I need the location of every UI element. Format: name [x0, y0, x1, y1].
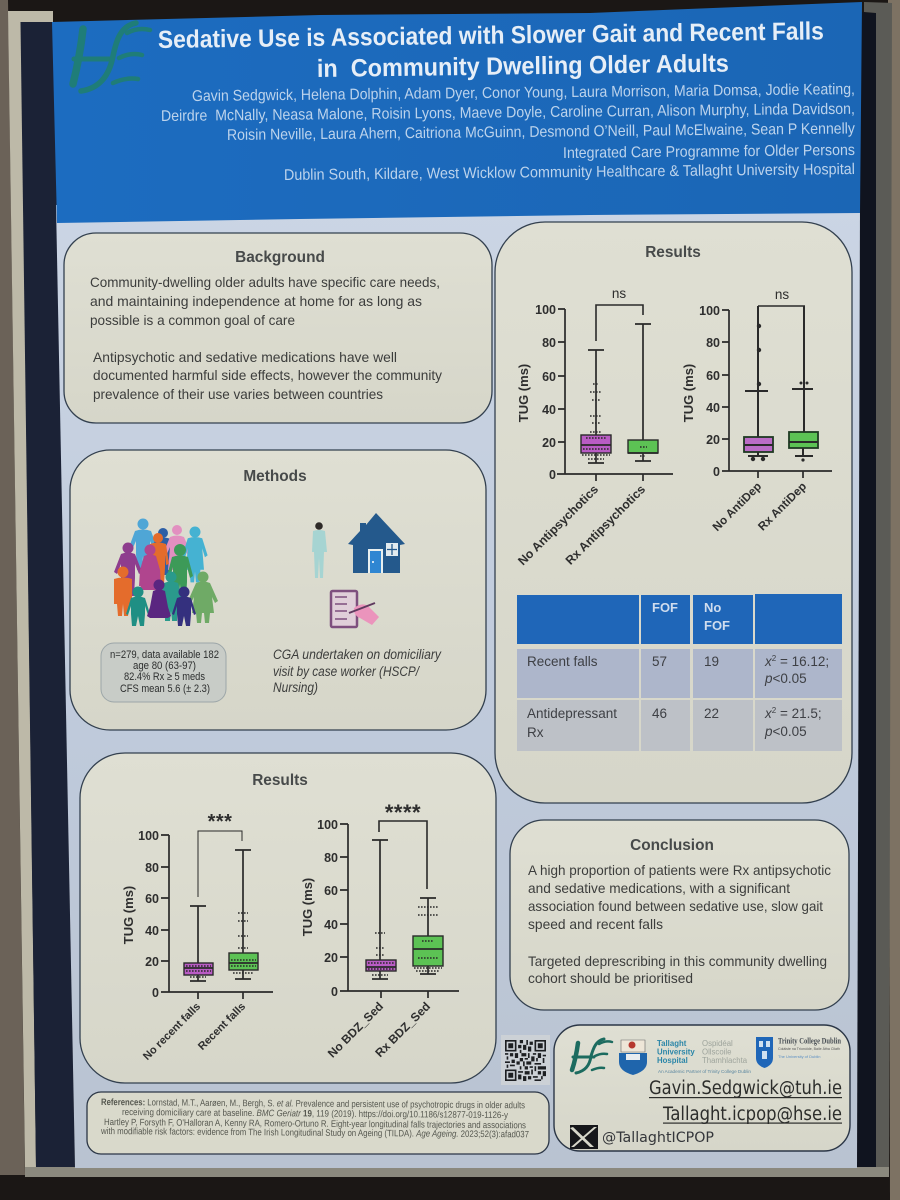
- conclusion text: Targeted deprescribing in this community dwelling: [528, 953, 827, 969]
- title: in Community Dwelling Older Adults: [317, 50, 729, 83]
- table: FOF: [517, 594, 842, 751]
- title: Sedative Use is Associated with Slower Gait and Recent Falls: [158, 17, 824, 54]
- chart: antidepressants: No AntiDep: [710, 480, 764, 534]
- table: FOF: 22: [704, 706, 719, 721]
- panel: results right: [495, 222, 852, 803]
- logo: Tallaght University Hospital: Tallaght: [657, 1039, 687, 1048]
- poster body: [56, 205, 860, 1168]
- icon: group of older people: [114, 518, 218, 626]
- table: FOF: Antidepressant: [527, 706, 617, 721]
- contact emails: Tallaght.icpop@hse.ie: [662, 1104, 842, 1125]
- background text: [90, 274, 442, 402]
- table: FOF: Recent falls: [527, 654, 598, 669]
- chart: recent falls: ***: [208, 811, 232, 833]
- conclusion text: cohort should be prioritised: [528, 970, 693, 986]
- chart: antidepressants: TUG (ms): [681, 364, 696, 422]
- chart: BDZ sedative: 60: [324, 884, 338, 898]
- conclusion text: speed and recent falls: [528, 916, 663, 932]
- chart: antipsychotics: 40: [542, 403, 556, 417]
- CGA text: CGA undertaken on domiciliary: [273, 647, 442, 662]
- icon: house: [348, 513, 405, 573]
- table: FOF: 57: [652, 654, 667, 669]
- chart: BDZ sedative: 80: [324, 851, 338, 865]
- chart: antipsychotics: Rx Antipsychotics: [563, 482, 648, 568]
- contact emails: Gavin.Sedgwick@tuh.ie: [649, 1078, 842, 1099]
- chart: antidepressants: 20: [706, 433, 720, 447]
- chart: recent falls: 20: [145, 955, 159, 969]
- panel: methods: [70, 450, 486, 730]
- stats callout: CFS mean 5.6 (± 2.3): [120, 683, 210, 695]
- chart: BDZ sedative: Rx BDZ_Sed: [372, 999, 433, 1060]
- logo: Tallaght University Hospital: An Academic Partner of Trinity College Dublin: [658, 1069, 751, 1074]
- chart: recent falls: 80: [145, 861, 159, 875]
- chart: recent falls: 0: [152, 986, 159, 1000]
- icon: HSE logo: [73, 23, 150, 91]
- conclusion text: association found between sedative use, slow gait: [528, 898, 823, 914]
- authors and affiliations: Gavin Sedgwick, Helena Dolphin, Adam Dyer, Conor Young, Laura Morrison, Maria Domsa, Jodie Keating,: [192, 81, 855, 105]
- references text: receiving domiciliary care at baseline. BMC Geriatr 19, 119 (2019). https://doi.org/10.1186/s12877-019-1126-y: [122, 1107, 508, 1120]
- chart: antipsychotics: 100: [535, 303, 556, 317]
- logo: Tallaght University Hospital: Ollscoile: [702, 1048, 731, 1056]
- CGA text: Nursing): [273, 680, 318, 695]
- references text: References: Lornstad, M.T., Aarøen, M., Bergh, S. et al. Prevalence and persistent use of psychotropic drugs in older adults: [101, 1097, 525, 1110]
- chart: BDZ sedative: TUG (ms): [300, 878, 315, 936]
- chart: recent falls: 60: [145, 892, 159, 906]
- logo: HSE: [572, 1039, 612, 1073]
- CGA text: [273, 647, 442, 695]
- background text: and maintaining independence at home for as long as: [90, 293, 422, 309]
- table: FOF: FOF: [704, 618, 730, 633]
- chart: BDZ sedative: 100: [317, 818, 338, 832]
- table: FOF: = 21.5;: [776, 706, 822, 721]
- conclusion text: and sedative medications, with a significant: [528, 880, 790, 896]
- background text: prevalence of their use varies between countries: [93, 386, 383, 402]
- chart: antipsychotics: ns: [612, 286, 626, 301]
- references text: with modifiable risk factors: evidence from The Irish Longitudinal Study on Ageing (TILDA). Age Ageing. 2023;52(3):afad037: [100, 1126, 529, 1139]
- references text: [100, 1097, 529, 1139]
- stats callout: [101, 643, 226, 702]
- background text: documented harmful side effects, however the community: [93, 367, 442, 383]
- chart: antidepressants: 0: [713, 465, 720, 479]
- stats callout: age 80 (63-97): [133, 660, 196, 672]
- chart: antidepressants: [681, 287, 832, 534]
- chart: antidepressants: 60: [706, 369, 720, 383]
- chart: antipsychotics: 20: [542, 436, 556, 450]
- logo: Trinity College Dublin: [756, 1036, 841, 1068]
- table: FOF: No: [704, 600, 721, 615]
- chart: antipsychotics: 0: [549, 468, 556, 482]
- chart: antidepressants: Rx AntiDep: [756, 480, 809, 533]
- panel: conclusion: [510, 820, 849, 1010]
- conclusion text: [528, 862, 831, 986]
- logo: Tallaght University Hospital: Hospital: [657, 1056, 688, 1065]
- table: FOF: 19: [704, 654, 719, 669]
- table: FOF: Rx: [527, 725, 544, 740]
- icon: checklist and hand: [331, 591, 379, 627]
- chart: antidepressants: 40: [706, 401, 720, 415]
- logo: Trinity College Dublin: Trinity College Dublin: [778, 1036, 841, 1046]
- heading: methods: Methods: [243, 468, 307, 485]
- chart: antipsychotics: 60: [542, 370, 556, 384]
- table: FOF: 2: [772, 654, 777, 663]
- logo: Trinity College Dublin: The University of Dublin: [778, 1054, 820, 1059]
- authors and affiliations: Roisin Neville, Laura Ahern, Caitriona McGuinn, Desmond O’Neill, Paul McElwaine, Sean P Kennelly: [227, 120, 855, 144]
- authors and affiliations: Deirdre McNally, Neasa Malone, Roisin Lyons, Maeve Doyle, Caroline Curran, Alison Murphy, Linda Davidson,: [161, 101, 855, 125]
- table: FOF: p<0.05: [764, 671, 807, 686]
- table: FOF: x: [764, 706, 773, 721]
- table: FOF: 46: [652, 706, 667, 721]
- chart: BDZ sedative: [300, 800, 459, 1061]
- logo: Trinity College Dublin: Coláiste na Tríonóide, Baile Átha Cliath: [778, 1047, 840, 1051]
- chart: recent falls: 40: [145, 924, 159, 938]
- conclusion text: A high proportion of patients were Rx antipsychotic: [528, 862, 831, 878]
- table: FOF: 2: [772, 706, 777, 715]
- stats callout: n=279, data available 182: [110, 649, 219, 661]
- icon: case worker: [312, 522, 327, 578]
- chart: recent falls: [121, 811, 273, 1063]
- references text: Hartley P, Forsyth F, O'Halloran A, Kenny RA, Romero-Ortuno R. Eight-year longitudinal falls trajectories and associations: [104, 1117, 526, 1130]
- header banner: [52, 2, 862, 223]
- heading: background: Background: [235, 249, 325, 266]
- table: FOF: x: [764, 654, 773, 669]
- chart: antipsychotics: 80: [542, 336, 556, 350]
- authors and affiliations: Dublin South, Kildare, West Wicklow Community Healthcare & Tallaght University Hospital: [284, 161, 855, 184]
- chart: recent falls: TUG (ms): [121, 886, 136, 944]
- stats callout: 82.4% Rx ≥ 5 meds: [124, 671, 205, 683]
- heading: results right: Results: [645, 244, 701, 261]
- icon: X logo: [570, 1125, 598, 1149]
- chart: recent falls: Recent falls: [196, 1001, 248, 1053]
- CGA text: visit by case worker (HSCP/: [273, 664, 420, 679]
- X handle: @TallaghtICPOP: [602, 1130, 714, 1146]
- logo: Tallaght University Hospital: Ospidéal: [702, 1039, 733, 1048]
- panel: background: [64, 233, 492, 423]
- chart: antidepressants: ns: [775, 287, 789, 302]
- logo: hospital crest: [619, 1040, 647, 1075]
- panel: contact and logos: [554, 1025, 850, 1151]
- chart: BDZ sedative: 0: [331, 985, 338, 999]
- chart: antipsychotics: No Antipsychotics: [515, 482, 601, 568]
- logo: Tallaght University Hospital: [657, 1039, 751, 1074]
- logo: Tallaght University Hospital: University: [657, 1048, 695, 1056]
- authors and affiliations: [161, 81, 855, 184]
- table: FOF: p<0.05: [764, 724, 807, 739]
- table: FOF: FOF: [652, 600, 678, 615]
- background text: possible is a common goal of care: [90, 312, 295, 328]
- panel: references: [87, 1092, 549, 1154]
- background text: Community-dwelling older adults have specific care needs,: [90, 274, 440, 290]
- chart: BDZ sedative: 40: [324, 918, 338, 932]
- chart: BDZ sedative: ****: [385, 800, 421, 825]
- title: [158, 17, 824, 83]
- authors and affiliations: Integrated Care Programme for Older Persons: [563, 142, 855, 162]
- chart: antipsychotics: TUG (ms): [516, 364, 531, 422]
- chart: antidepressants: 80: [706, 336, 720, 350]
- logo: Tallaght University Hospital: Thamhlachta: [702, 1056, 748, 1065]
- QR code: [501, 1035, 550, 1085]
- chart: BDZ sedative: 20: [324, 951, 338, 965]
- table: FOF: = 16.12;: [776, 654, 829, 669]
- chart: antipsychotics: [515, 286, 673, 568]
- heading: results left: Results: [252, 772, 308, 789]
- chart: antidepressants: 100: [699, 304, 720, 318]
- panel: results left: [80, 753, 496, 1083]
- contact emails: [649, 1078, 842, 1125]
- chart: recent falls: No recent falls: [141, 1001, 203, 1063]
- chart: BDZ sedative: No BDZ_Sed: [325, 999, 386, 1061]
- background text: Antipsychotic and sedative medications have well: [93, 349, 397, 365]
- heading: conclusion: Conclusion: [630, 837, 714, 854]
- chart: recent falls: 100: [138, 829, 159, 843]
